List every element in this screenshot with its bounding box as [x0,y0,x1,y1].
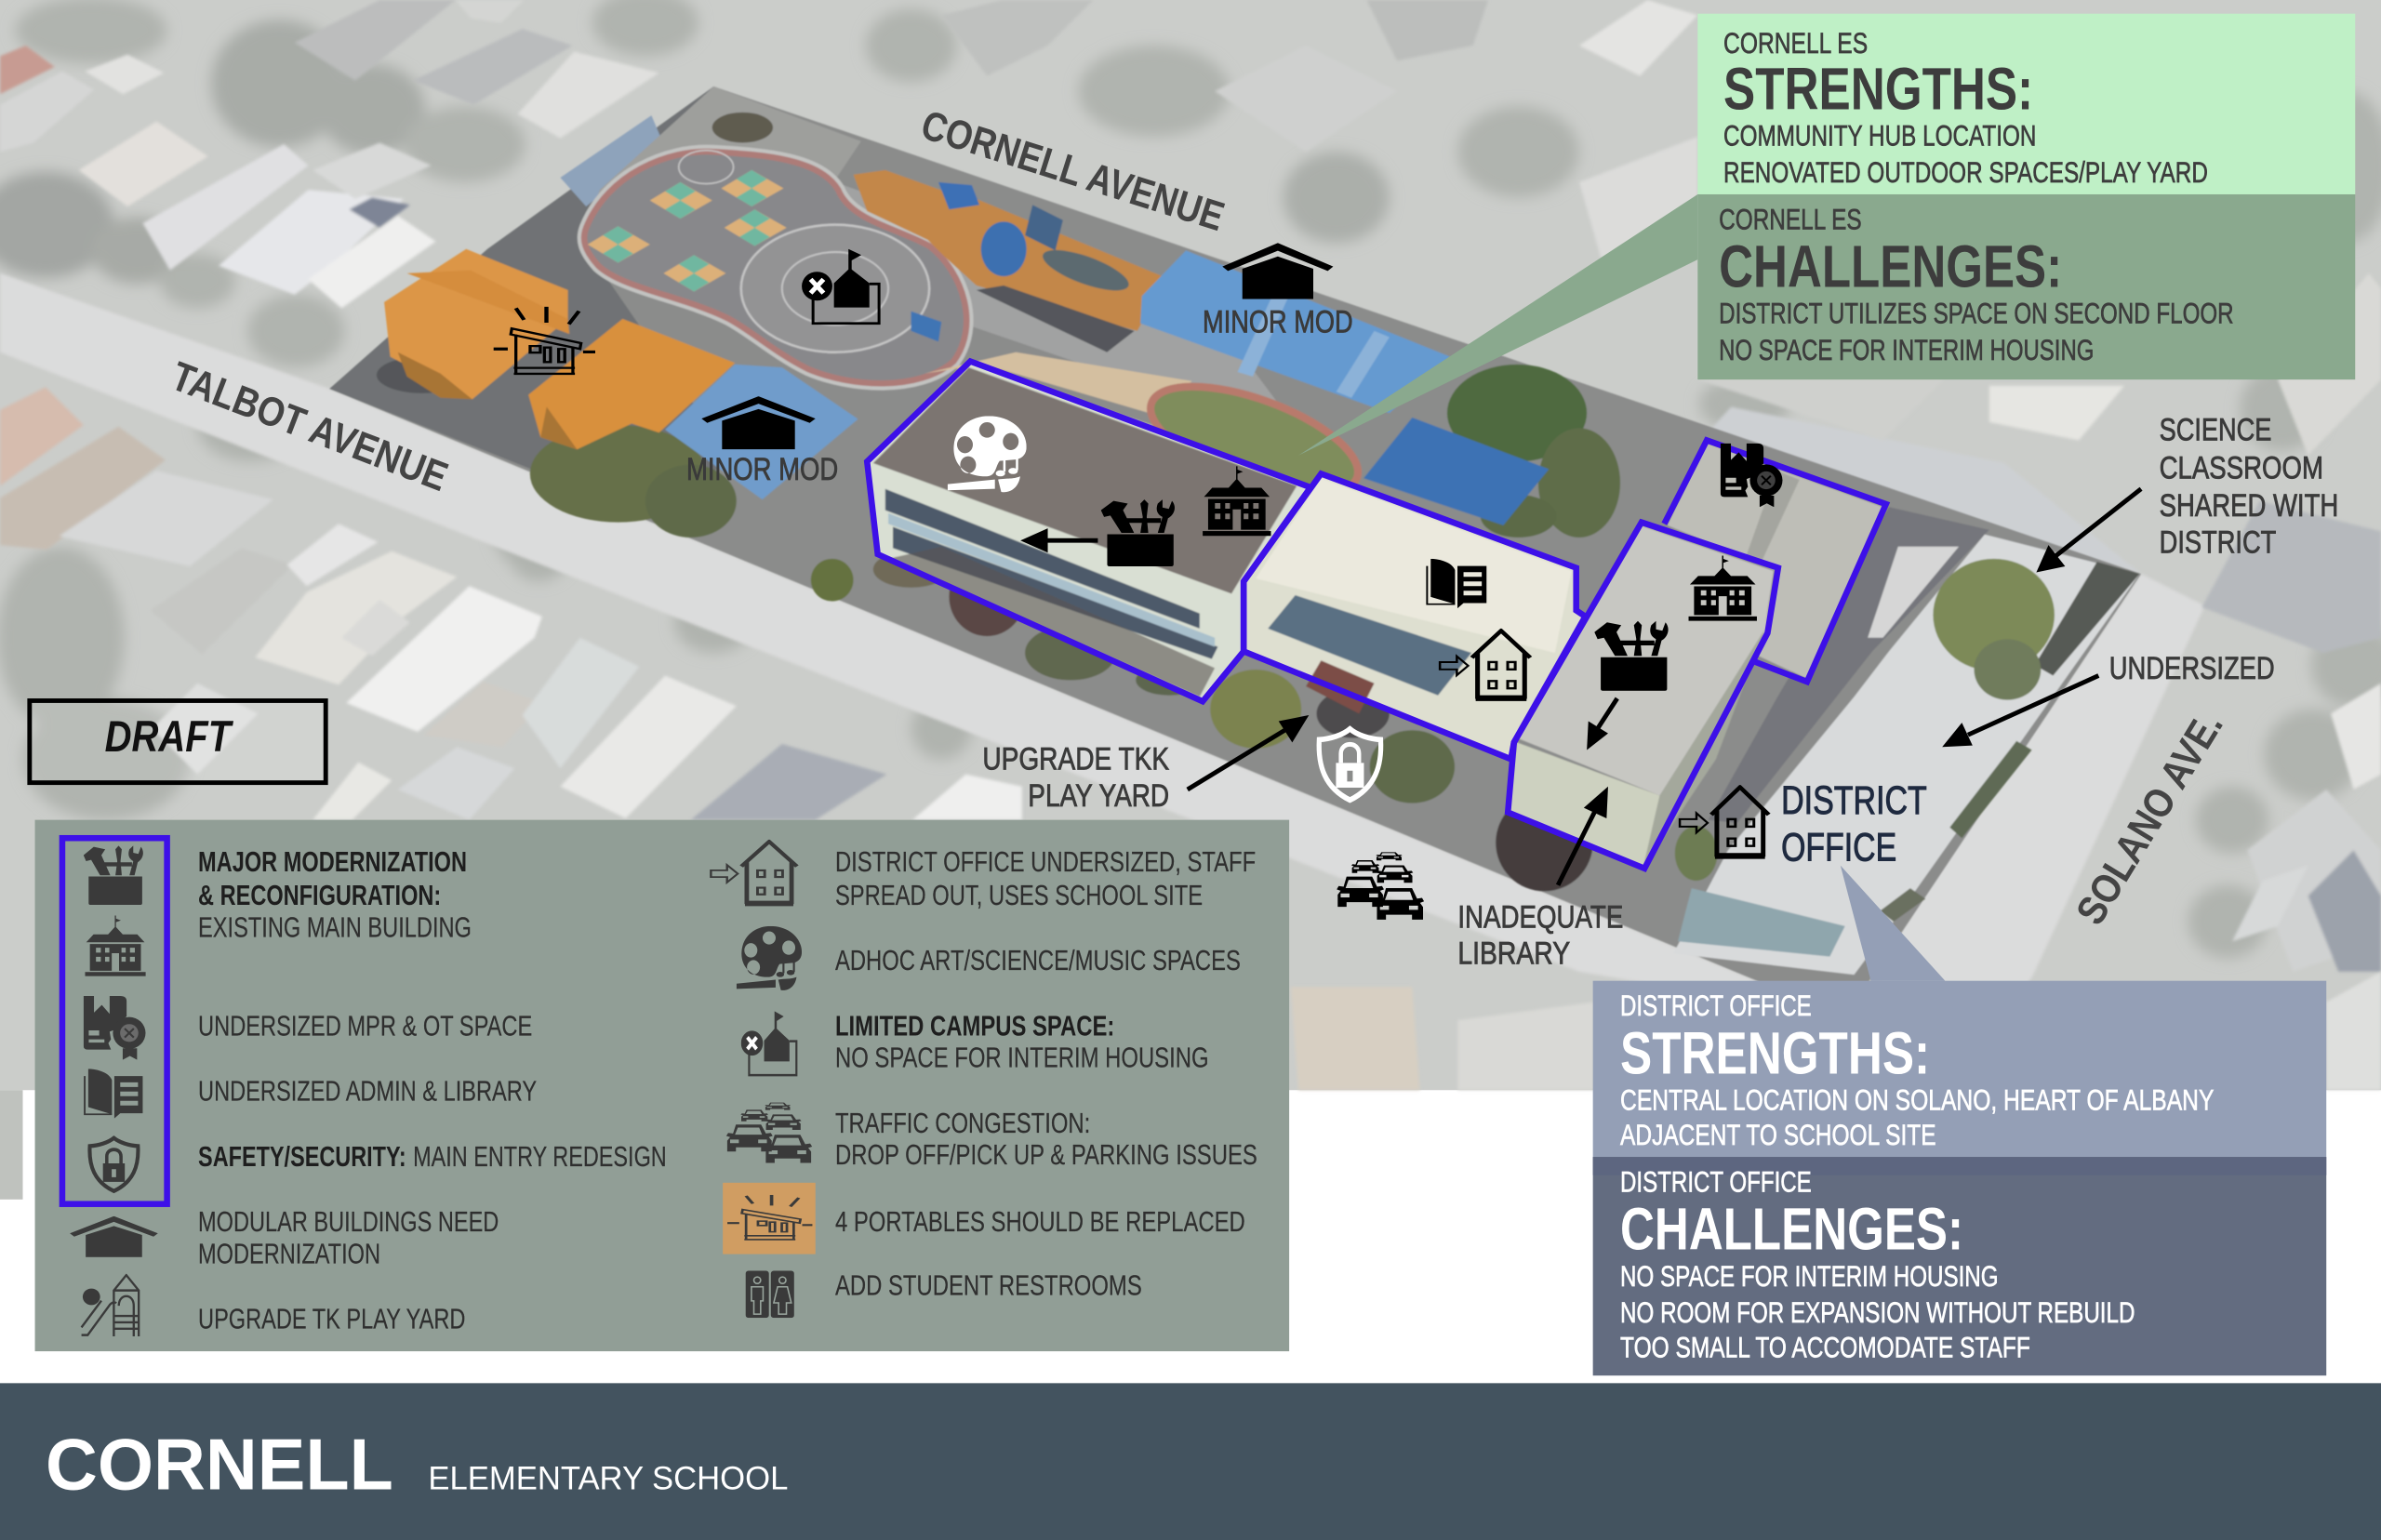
panel: district strengths: CENTRAL LOCATION ON SOLANO, HEART OF ALBANY [1620,1083,2214,1116]
panel: Cornell challenges [1697,194,2355,379]
legend text: adhoc: ADHOC ART/SCIENCE/MUSIC SPACES [835,946,1241,976]
blue tents [1363,418,1549,525]
legend icon: modular house [70,1216,158,1257]
panel: Cornell challenges: NO SPACE FOR INTERIM HOUSING [1719,334,2094,366]
panel: Cornell strengths: COMMUNITY HUB LOCATION [1723,120,2036,153]
panel: district strengths: DISTRICT OFFICE [1620,989,1812,1022]
legend icon: restrooms [746,1271,794,1318]
road bands [0,273,2205,1090]
legend text: traffic: DROP OFF/PICK UP & PARKING ISSUES [835,1140,1257,1171]
legend text: modular: MODERNIZATION [198,1239,380,1269]
panel: district challenges: NO SPACE FOR INTERIM HOUSING [1620,1260,1999,1293]
label: upgrade TKK play yard: UPGRADE TKK [982,742,1169,777]
legend text: portables: 4 PORTABLES SHOULD BE REPLACED [835,1207,1245,1238]
green field [1137,365,1371,516]
label: undersized: UNDERSIZED [2109,651,2275,686]
label: inadequate library: INADEQUATE [1457,900,1623,936]
map label: minor mod north: MINOR MOD [1203,305,1353,340]
legend icon: book [85,1069,142,1119]
street label: Solano Ave: SOLANO AVE. [2068,704,2232,933]
footer band [0,1383,2381,1540]
arrow: undersized [1942,676,2098,747]
label: district office: OFFICE [1781,826,1896,870]
map icon: MPR [1721,444,1782,507]
map icon: palette [948,416,1027,492]
title: CORNELL [46,1424,393,1506]
map icon: limited campus [802,249,879,324]
label: district office: DISTRICT [1781,778,1927,822]
panel: district challenges: CHALLENGES: [1620,1197,1963,1263]
site aerial block [329,86,2141,1017]
legend text: limited campus: NO SPACE FOR INTERIM HOUSING [835,1043,1209,1074]
legend text: safety: SAFETY/SECURITY: [198,1142,406,1173]
legend icon: school [85,915,146,976]
map icon: toolbox main building [1101,499,1175,566]
legend text: restrooms: ADD STUDENT RESTROOMS [835,1271,1142,1302]
sand strip [924,352,1192,415]
label: inadequate library: LIBRARY [1457,936,1570,972]
legend icon: palette [737,926,802,990]
callout pointer: district office [1841,866,1945,981]
street label: Cornell Avenue: CORNELL AVENUE [916,102,1230,240]
label: district office [1781,778,1927,870]
legend text: modular [198,1207,499,1269]
map icon: school main [1203,466,1271,536]
legend text: district office [835,847,1256,911]
callout pointer: Cornell ES [1298,194,1697,456]
roofs of neighbouring houses [0,0,2381,1090]
legend icon: portables swatch [723,1183,816,1255]
trees [1447,365,1587,461]
panel: district challenges: TOO SMALL TO ACCOMODATE STAFF [1620,1332,2030,1364]
label: science classroom [2160,412,2338,560]
legend text: major modernization [198,847,472,943]
map label: minor mod west: MINOR MOD [686,452,838,487]
purple outline: east wing [1508,523,1778,869]
legend text: limited campus: LIMITED CAMPUS SPACE: [835,1011,1114,1042]
purple outline: existing main building [867,362,1310,701]
legend group frame [62,838,167,1204]
map icon: minor mod north [1222,243,1333,299]
panel: district challenges: DISTRICT OFFICE [1620,1166,1812,1199]
label: science classroom: SCIENCE [2160,412,2271,447]
panel: district strengths: STRENGTHS: [1620,1020,1930,1086]
back building roof [1668,444,1882,679]
panel: Cornell strengths: STRENGTHS: [1723,57,2033,123]
middle building [1244,473,1585,759]
legend text: traffic [835,1109,1257,1171]
arrow: play yard [1188,715,1309,790]
map icon: district office [1680,787,1769,857]
orange play yard [854,170,1166,331]
label: inadequate library [1457,900,1623,972]
purple outline: MPR building [1664,440,1886,682]
street label: Talbot Avenue: TALBOT AVENUE [166,353,454,500]
label: upgrade TKK play yard: PLAY YARD [1028,778,1169,814]
legend icon: shield [89,1138,138,1191]
legend text: safety [198,1142,667,1173]
arrow: library [1558,787,1608,885]
legend text: major modernization: & RECONFIGURATION: [198,881,441,911]
aerial background [0,0,2381,1200]
legend text: major modernization: EXISTING MAIN BUILDING [198,912,472,943]
panel: Cornell challenges: DISTRICT UTILIZES SPACE ON SECOND FLOOR [1719,298,2234,330]
legend icon: limited campus [741,1011,796,1075]
label: science classroom: DISTRICT [2160,524,2276,560]
map icon: school east [1689,556,1757,621]
east wing [1517,525,1774,796]
legend text: admin library: UNDERSIZED ADMIN & LIBRARY [198,1077,537,1108]
tree masses [0,0,2381,958]
legend text: major modernization: MAJOR MODERNIZATION [198,847,467,878]
blue modular roof west [665,365,858,499]
map icon: cars [1337,852,1424,920]
label: upgrade TKK play yard [982,742,1169,814]
legend icon: office [711,842,797,905]
panel: district strengths: ADJACENT TO SCHOOL SITE [1620,1119,1936,1151]
hopscotch squares [588,170,787,291]
map icon: portables [494,307,595,374]
main building [869,362,1310,701]
legend text: safety: MAIN ENTRY REDESIGN [413,1142,667,1173]
legend icon: play structure [82,1275,139,1336]
panel: Cornell strengths: CORNELL ES [1723,27,1868,60]
purple outline: admin and library building [1244,473,1585,759]
pathways [972,365,1519,577]
panel: Cornell strengths [1697,14,2355,194]
playground asphalt with running track [584,152,966,383]
legend text: modular: MODULAR BUILDINGS NEED [198,1207,499,1238]
subtitle: ELEMENTARY SCHOOL [428,1461,788,1497]
map icon: office upper [1440,631,1530,699]
dark west corner [329,86,729,524]
blue modular roof north [1140,250,1450,413]
map icon: book [1427,559,1486,608]
arrow: science classroom [2036,489,2141,573]
portable roofs [384,249,568,399]
legend text: traffic: TRAFFIC CONGESTION: [835,1109,1090,1139]
panel: district challenges: NO ROOM FOR EXPANSION WITHOUT REBUILD [1620,1296,2135,1329]
panel: district strengths [1593,981,2326,1157]
legend icon: cars [726,1103,812,1162]
map icon: minor mod west [701,396,816,449]
map icon: toolbox east [1594,621,1669,691]
panel: Cornell strengths: RENOVATED OUTDOOR SPACES/PLAY YARD [1723,156,2208,189]
parking and road east [1709,507,1989,823]
legend icon: toolbox [84,845,143,905]
map icon: shield [1319,729,1381,800]
arrow: main building [1020,528,1097,552]
label: science classroom: SHARED WITH [2160,488,2338,524]
legend text: MPR: UNDERSIZED MPR & OT SPACE [198,1011,532,1042]
draft stamp [30,700,326,783]
label: science classroom: CLASSROOM [2160,450,2323,485]
panel: Cornell challenges: CORNELL ES [1719,204,1862,236]
legend text: district office: SPREAD OUT, USES SCHOOL SITE [835,881,1203,911]
panel: district challenges [1593,1157,2326,1375]
draft stamp: DRAFT [105,712,234,762]
district office roof [1673,535,2139,975]
panel: legend [35,820,1289,1351]
arrow: east wing [1587,698,1617,750]
legend text: district office: DISTRICT OFFICE UNDERSIZED, STAFF [835,847,1256,878]
panel: Cornell challenges: CHALLENGES: [1719,234,2062,300]
legend text: limited campus [835,1011,1209,1074]
legend text: play yard: UPGRADE TK PLAY YARD [198,1305,465,1335]
legend icon: MPR [84,996,145,1060]
